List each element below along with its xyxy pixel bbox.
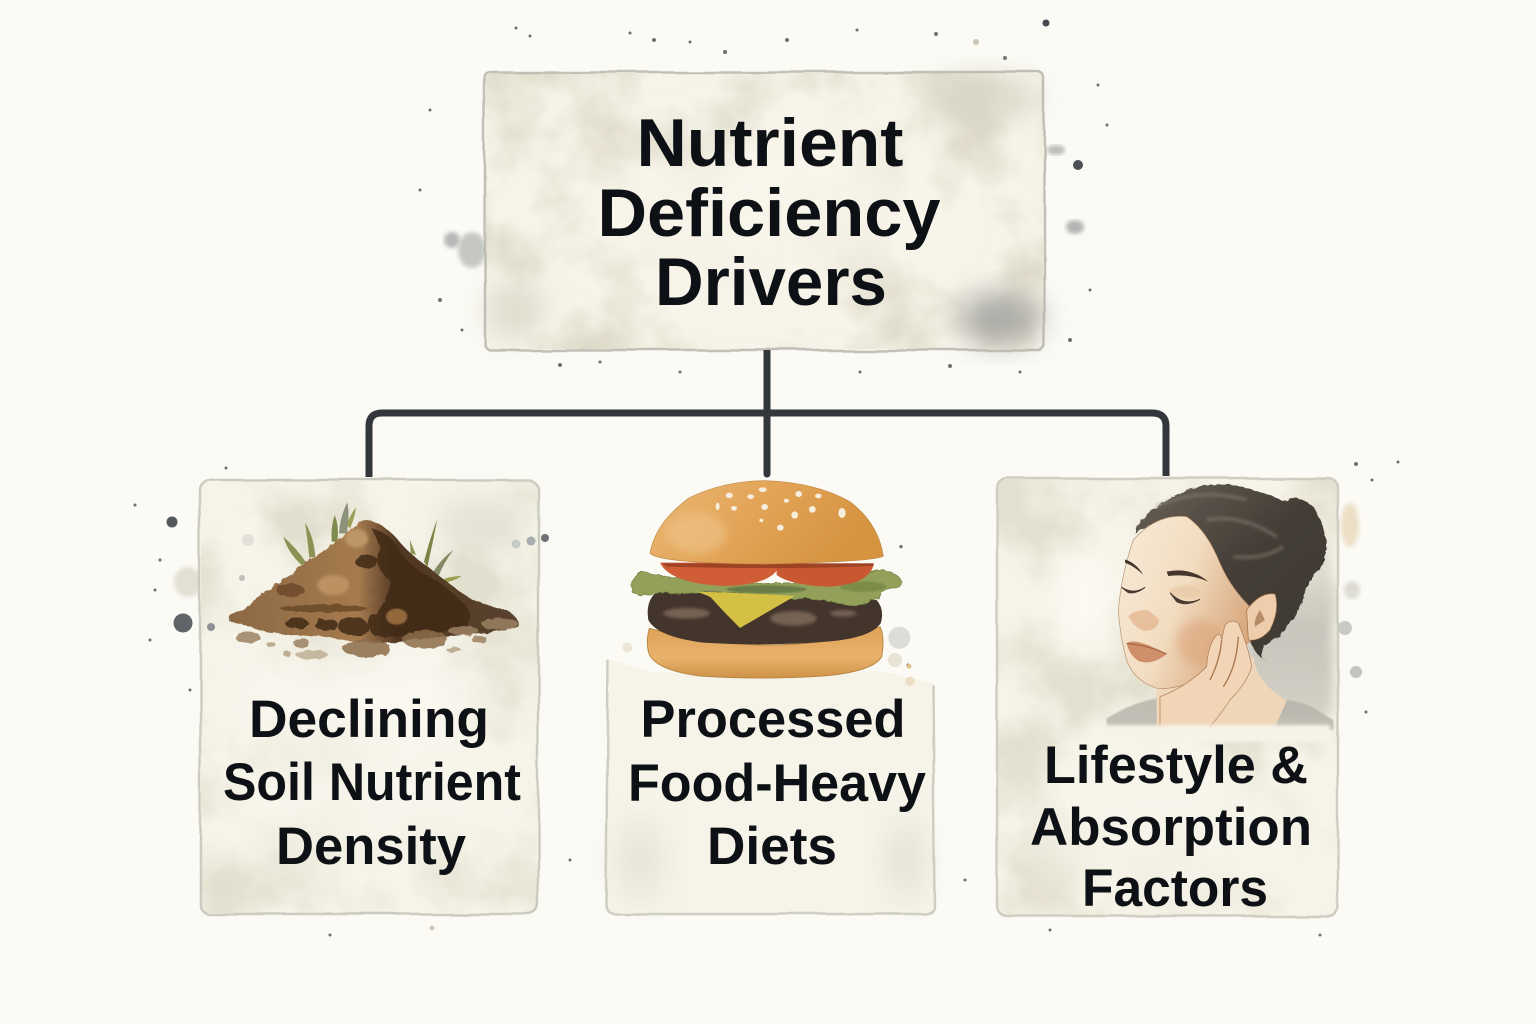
lifestyle label <box>1030 736 1312 918</box>
title text: Nutrient <box>636 105 904 181</box>
bottom bun <box>647 627 883 678</box>
icon: burger <box>622 481 915 686</box>
soil shadows and highlights <box>276 528 470 637</box>
lifestyle card background <box>997 478 1338 916</box>
soil label: Soil Nutrient <box>223 753 521 812</box>
soil crumbs <box>235 618 518 659</box>
eyebrows <box>1125 559 1143 575</box>
title text: Deficiency <box>598 175 941 251</box>
ear <box>1247 594 1277 640</box>
shoulders <box>1107 698 1333 730</box>
food label: Food-Heavy <box>628 754 927 813</box>
lips <box>1127 641 1167 662</box>
cheek blush <box>1177 620 1223 667</box>
title card wash <box>485 72 1044 350</box>
hand <box>1160 621 1252 730</box>
hair highlights <box>1157 495 1283 557</box>
panel: lifestyle and absorption <box>997 478 1338 918</box>
neck <box>1157 657 1287 730</box>
portrait bottom fade <box>1103 725 1330 742</box>
lifestyle label: Lifestyle & <box>1044 736 1308 795</box>
lifestyle label: Absorption <box>1030 798 1312 857</box>
hair back and bun <box>1135 484 1326 662</box>
soil label <box>223 690 521 876</box>
soil label: Density <box>276 817 467 876</box>
cheese <box>696 592 795 628</box>
panel: processed food <box>606 481 934 914</box>
burger splashes <box>888 627 910 649</box>
tomato slices <box>660 563 780 586</box>
food card background <box>606 660 934 914</box>
sesame seeds <box>716 487 846 531</box>
panel: declining soil <box>200 480 538 914</box>
top bun <box>650 481 883 564</box>
food label <box>628 690 927 876</box>
soil card background <box>200 480 538 914</box>
nose <box>1128 610 1159 631</box>
soil label: Declining <box>249 690 489 749</box>
mound <box>228 519 519 643</box>
lettuce <box>631 570 902 607</box>
connector lines <box>369 350 1166 477</box>
grass blades <box>283 502 462 583</box>
lifestyle label: Factors <box>1082 859 1268 918</box>
icon: woman holding face <box>1103 484 1333 742</box>
food label: Diets <box>707 817 837 876</box>
title text <box>598 105 941 320</box>
title panel <box>485 72 1044 350</box>
title text: Drivers <box>655 244 887 320</box>
patty <box>648 591 882 644</box>
face <box>1118 516 1254 689</box>
icon: soil mound with grass <box>228 502 519 659</box>
food label: Processed <box>640 690 906 749</box>
background paint splatter <box>134 20 1400 936</box>
eyelids and lashes <box>1170 586 1200 598</box>
